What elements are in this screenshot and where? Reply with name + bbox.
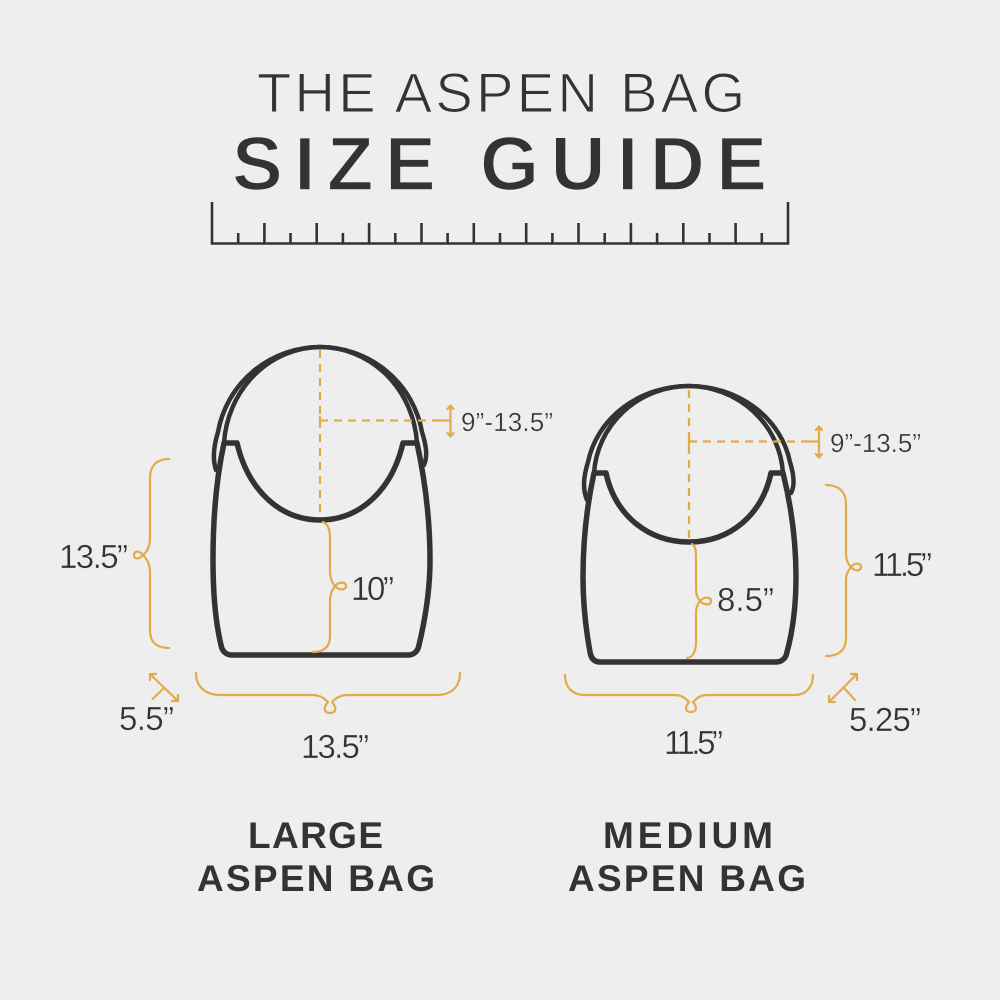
medium label line 2: ASPEN BAG: [568, 858, 806, 899]
medium width label: 11.5”: [664, 724, 723, 761]
icon: ruler: [212, 202, 788, 244]
large handle drop arrow: [448, 406, 454, 436]
medium bag depth dashed line: [688, 390, 690, 540]
medium depth label: 5.25”: [849, 701, 921, 738]
medium inner depth label: 8.5”: [717, 581, 774, 618]
large width label: 13.5”: [301, 728, 369, 765]
medium bag outer handle: [584, 386, 794, 500]
large bag illustration: [59, 347, 553, 765]
large depth label: 5.5”: [119, 700, 174, 737]
medium bag handle dashed line: [689, 440, 810, 443]
medium handle drop arrow: [816, 426, 822, 458]
medium bag inner handle: [594, 386, 783, 473]
large bag depth dashed line: [319, 350, 321, 515]
medium handle drop label: 9”-13.5”: [830, 428, 921, 458]
title: size guide: SIZE GUIDE: [232, 122, 767, 207]
medium depth arrow: [829, 674, 857, 702]
large handle drop label: 9”-13.5”: [461, 407, 553, 437]
large bag body: [213, 443, 430, 655]
large bag handle dashed line: [320, 419, 441, 422]
medium width brace: [565, 675, 813, 712]
medium height label: 11.5”: [872, 546, 932, 583]
medium bag illustration: [565, 386, 932, 761]
large height brace: [134, 459, 169, 648]
large width brace: [196, 673, 460, 713]
large inner depth label: 10”: [351, 570, 394, 607]
large label line 2: ASPEN BAG: [197, 858, 435, 899]
large height label: 13.5”: [59, 538, 128, 575]
medium bag body: [583, 473, 796, 662]
large bag outer handle: [214, 347, 426, 470]
large bag inner handle: [224, 347, 417, 443]
large label line 1: LARGE: [248, 815, 383, 856]
medium height brace: [826, 485, 861, 656]
medium inner depth brace: [687, 544, 711, 658]
medium label line 1: MEDIUM: [603, 815, 773, 856]
large inner depth brace: [313, 522, 346, 652]
title: the aspen bag: THE ASPEN BAG: [257, 61, 745, 124]
large depth arrow: [150, 674, 178, 701]
